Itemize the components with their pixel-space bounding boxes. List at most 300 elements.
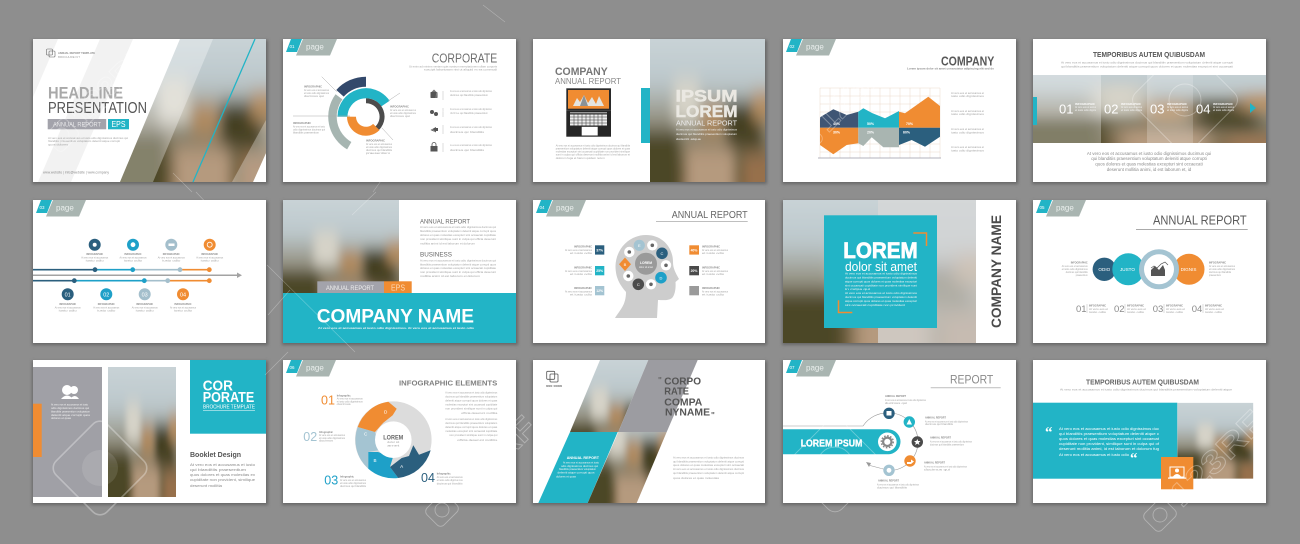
numbered circles (62, 288, 189, 300)
numbered list: iusto odio (1089, 310, 1106, 314)
cycle center label: amet (387, 444, 400, 448)
cycle center label: dolor sit (387, 440, 399, 444)
numbered list: INFOGRAPHIC (1205, 304, 1223, 308)
left side text: et iusto odio dignissimos (1062, 267, 1088, 271)
step text: ducimus qui blanditiis (340, 484, 366, 488)
left side text: INFOGRAPHIC (1071, 260, 1088, 264)
body text: quos dolores et quas molestias (673, 476, 720, 480)
chart values: 50% (867, 122, 875, 126)
orange bar (33, 404, 42, 457)
left percentage boxes (595, 245, 604, 295)
node labels: ducimus qui blanditiis (925, 422, 953, 426)
booklet text: qui blanditiis praesentium (190, 467, 247, 472)
left labels: et iusto odio (570, 251, 592, 255)
icon: gear (878, 432, 897, 451)
headline: HEADLINE (48, 84, 123, 102)
body text (556, 144, 630, 160)
page tab (1036, 200, 1086, 216)
annual report text: non provident similique sunt in culpa qui officia deserunt (420, 237, 496, 241)
left labels: At vero eos et accusamus (565, 269, 592, 273)
subheadline: PRESENTATION (48, 100, 147, 117)
step text: ducimus (337, 402, 351, 406)
step text (319, 394, 463, 488)
process arc (783, 413, 918, 471)
brain hub circle: LOREM (640, 260, 653, 265)
side legend text: iusto odio dignissimos (951, 94, 985, 98)
step text: ducimus qui blanditiis (437, 482, 463, 486)
teal rule (203, 410, 255, 412)
circular cycle chart: B (373, 458, 377, 463)
right labels: At vero eos et accusamus (702, 269, 728, 273)
top milestone text: INFOGRAPHIC (86, 252, 104, 256)
title: COMPANY (941, 55, 995, 69)
slide 12: infographic elements cycle (283, 360, 516, 503)
left side text: At vero eos et accusamus (1062, 264, 1088, 268)
numbered steps: et iusto odio dignis (1213, 108, 1234, 112)
circular cycle chart: C (364, 432, 368, 436)
donut labels: praesentium (366, 151, 391, 155)
upper photo parallelogram (570, 360, 648, 432)
title rule (1136, 228, 1248, 230)
numbered steps: 03 (1150, 101, 1164, 116)
page tab: page (306, 364, 324, 372)
body text: qui blanditiis praesentium voluptatum deleniti atque corrupti (673, 460, 744, 464)
step text: At vero eos et accusamus (319, 433, 345, 437)
title: ANNUAL REPORT (672, 210, 748, 221)
ring of small nodes (619, 240, 671, 290)
business text: mollitia animi id est laborum et dolorum (420, 274, 481, 278)
photo (283, 200, 399, 293)
grey parallelogram (618, 360, 698, 432)
grey arrow (33, 272, 242, 278)
chart values: 20% (867, 130, 875, 134)
right side text: INFOGRAPHIC (1209, 260, 1227, 264)
page tab: page (56, 204, 74, 212)
left labels: At vero eos et accusamus (565, 290, 592, 294)
photo (650, 39, 765, 182)
watermark: faint stamp overlays: 123RF (63, 37, 160, 134)
watermark: faint stamp overlays: 123RF (1161, 403, 1272, 514)
ipsum heading: IPSUM (676, 86, 738, 106)
numbered list: 03 (1153, 304, 1163, 315)
panel text: blanditiis praesentium voluptatum (51, 410, 90, 414)
numbered list: 02 (1114, 304, 1125, 315)
photo caption: deleniti atque (676, 137, 701, 141)
numbered circles: 02 (103, 292, 109, 298)
slide 7: company name with teal band (283, 200, 516, 343)
booklet text: quos dolores et quas molestias ex (190, 472, 255, 477)
corporate company name heading: " (658, 376, 662, 385)
cor heading: COR (203, 377, 233, 394)
page tab: 03 (40, 205, 45, 210)
step text: et iusto odio dignissimos (319, 436, 345, 440)
node labels: ducimus qui (885, 401, 907, 405)
right labels: INFOGRAPHIC (702, 244, 721, 248)
node labels: At vero eos et accusamus et iusto odio dignissimos (925, 420, 968, 424)
right column text: officia deserunt mollitia (461, 411, 498, 415)
body text: deserunt mollitia animi, id est laborum et, id (1107, 167, 1192, 172)
teal left marker (1033, 97, 1037, 125)
booklet text: cupiditate non provident, similique (190, 477, 256, 482)
teal quote band (1033, 403, 1177, 479)
business text: At vero eos et accusamus et iusto odio dignissimos ducimus qui (420, 258, 496, 262)
booklet text: deserunt mollitia (190, 483, 223, 488)
quote text: cupiditate non provident, similique sunt in culpa qui of (1059, 441, 1160, 446)
step numbers: 02 (303, 430, 317, 444)
corporate company name heading: CORPO (664, 377, 701, 388)
title: TEMPORIBUS AUTEM QUIBUSDAM (1093, 52, 1205, 59)
node labels: ANNUAL REPORT (930, 436, 951, 440)
annual report label: ANNUAL REPORT (676, 119, 737, 128)
step text: et iusto odio dignissimos (340, 481, 366, 485)
numbered steps: et iusto odio dignis (1167, 108, 1188, 112)
lower milestone text (55, 302, 196, 312)
right column text: ducimus qui blanditiis praesentium voluptatum (445, 394, 498, 398)
icon list text: ducimus qui blanditiis praesentium (450, 111, 488, 115)
cover photo (120, 39, 266, 182)
title: INFOGRAPHIC ELEMENTS (399, 378, 497, 387)
title rule (931, 387, 1001, 389)
overlapping circles: DIGNIS (1181, 267, 1196, 272)
corporate company name heading: " (711, 411, 715, 420)
slide 6: timeline (33, 200, 266, 343)
square body text: sint occaecati cupiditate non provident (845, 303, 905, 307)
icon list text: ducimus qui blanditiis (450, 130, 485, 134)
step text: Infographic (437, 472, 451, 476)
numbered list: 01 (1076, 304, 1087, 315)
subtitle lines (1061, 60, 1233, 68)
orange corner brackets (838, 233, 926, 312)
quote text: At vero eos et accusamus et iusto odio (1059, 452, 1130, 457)
step numbers: 01 (321, 393, 335, 407)
lower milestone text: At vero eos et accusamus (55, 306, 81, 310)
panel text: odio dignissimos ducimus qui (51, 406, 89, 410)
page tab: page (806, 364, 824, 372)
corporate company name heading: COMPA (664, 397, 702, 408)
donut labels: blanditiis praesentium (293, 130, 319, 134)
body text: At vero eos et accusamus et iusto odio dignissimos ducimus qui blanditiis (556, 144, 630, 148)
numbered steps: INFOGRAPHIC (1121, 102, 1142, 106)
side legend text: iusto odio dignissimos (951, 148, 985, 152)
teal diagonal line (193, 39, 255, 182)
top milestone text: INFOGRAPHIC (124, 252, 142, 256)
body text (673, 456, 744, 480)
square body text: atque corrupti quos dolores et quas molestias excepturi (845, 280, 917, 284)
top milestone text: At vero eos et accusamus (120, 256, 147, 260)
photo caption: ducimus qui blanditiis praesentium voluptatum (676, 132, 737, 136)
donut labels: et iusto odio dignissimos (390, 111, 416, 115)
numbered list: At vero eos et (1166, 307, 1185, 311)
page tab: 04 (540, 205, 545, 210)
subtitle lines: qui blanditiis praesentium voluptatum deleniti atque corrupti quos dolores et quas molestias excepturi sint occaecati (1061, 64, 1233, 68)
ring of small nodes: B (624, 262, 627, 267)
chart values: 40% (833, 122, 841, 126)
panel text: dolores et quas (51, 416, 71, 420)
right labels: At vero eos et accusamus (702, 248, 728, 252)
top milestone text: iusto odio (162, 258, 181, 262)
teal panel text: deleniti atque corrupti quos (558, 470, 595, 474)
icon list text: ducimus qui blanditiis (450, 148, 485, 152)
step text: Infographic (337, 394, 351, 398)
teal panel text: ANNUAL REPORT (567, 456, 600, 460)
step text: At vero eos et accusamus (337, 396, 363, 400)
lower milestone text: iusto odio (59, 308, 77, 312)
quote text: qui blanditiis praesentium voluptatum deleniti atque c (1059, 431, 1159, 436)
square body text (845, 272, 918, 307)
slide 1: headline presentation cover (33, 38, 266, 182)
square body text: sint occaecati cupiditate non provident similique sunt (845, 284, 917, 288)
slide 14: report process (783, 360, 1016, 503)
donut labels: INFOGRAPHIC (366, 138, 386, 142)
donut labels: At vero eos et accusamus et iusto (293, 124, 325, 128)
numbered list: iusto odio (1166, 310, 1183, 314)
title: REPORT (950, 373, 994, 387)
page tab: page (306, 42, 324, 52)
donut labels: ducimus qui blanditiis (366, 148, 392, 152)
chart grid (820, 88, 940, 158)
annual report tag (48, 119, 106, 129)
donut chart (293, 77, 400, 146)
numbered list: iusto odio (1127, 310, 1144, 314)
right labels: INFOGRAPHIC (702, 266, 721, 270)
right column text: molestias excepturi sint occaecati cupiditate (445, 429, 498, 433)
tagline: At vero eos et accusamus et iusto odio dignissimos. At vero eos et accusamus et iusto odio (318, 326, 474, 330)
teal panel text: odio dignissimos ducimus qui (561, 464, 598, 468)
subtitle lines: At vero eos et accusamus et iusto odio dignissimos ducimus qui blanditiis praesentium voluptatum deleniti atque corrupti (1061, 60, 1233, 64)
teal panel text: dolores et quas (556, 474, 576, 478)
logo: 000 0000 (546, 384, 562, 388)
right labels: INFOGRAPHIC (702, 286, 721, 290)
subtitle lines (409, 64, 497, 72)
title: TEMPORIBUS AUTEM QUIBUSDAM (1086, 380, 1199, 387)
slide 8: annual report head infographic (533, 200, 765, 343)
numbered list: INFOGRAPHIC (1089, 304, 1107, 308)
right column text: officia deserunt mollitia (457, 438, 498, 442)
top milestone text: At vero eos et accusamus (196, 256, 224, 260)
right side text (1209, 260, 1235, 277)
footer contacts: www.website | info@website | www.company (43, 170, 109, 174)
icon: growth chart (1151, 262, 1168, 276)
side legend text (951, 91, 985, 152)
grey panel (33, 367, 102, 497)
circular cycle chart (355, 401, 432, 478)
business text: dolores et quas molestias excepturi sint occaecati cupiditate (420, 266, 496, 270)
ring of small nodes: C (661, 251, 664, 256)
donut labels: INFOGRAPHIC (390, 104, 410, 108)
icon list text: At vero eos et accusamus et iusto odio dignissimos (450, 107, 492, 111)
numbered circles: 04 (180, 292, 186, 298)
numbered steps: 02 (1104, 101, 1118, 116)
cycle center label: LOREM (383, 435, 403, 441)
step text: At vero eos et accusamus (437, 475, 463, 479)
top milestone text: INFOGRAPHIC (201, 252, 219, 256)
subtitle lines: suscipit laboriosam nisi ut aliquid ex ea commodi (424, 68, 497, 72)
icon list text: ducimus qui blanditiis praesentium (450, 93, 488, 97)
numbered list: iusto odio (1205, 310, 1222, 314)
slide 11: corporate brochure (33, 360, 266, 503)
node labels: ducimus qui blanditiis praesentium (930, 442, 964, 446)
node labels: ducimus qui blanditiis (877, 486, 908, 490)
chart values (833, 122, 914, 134)
subtitle: At vero eos et accusamus et iusto odio dignissimos ducimus qui blanditiis praesentium voluptatum deleniti atque (1060, 388, 1232, 392)
body text: At vero eos et accusamus et iusto odio dignissimos ducimus (673, 467, 744, 471)
body text: quos dolores et quas molestias excepturi sint occaecati (673, 463, 744, 467)
brain hub circle: dolor sit amet (639, 265, 653, 269)
top milestone circles (89, 239, 216, 251)
quote text: deserunt mollitia animi, id est laborum et dolorum fug (1059, 446, 1159, 451)
numbered steps: At vero eos et accus (1075, 105, 1096, 109)
orange square with icon (1161, 457, 1193, 489)
slide 4: company area chart (783, 39, 1016, 182)
brain hub circle (635, 253, 657, 275)
photo (1177, 402, 1254, 479)
logo (546, 371, 562, 388)
business text: blanditiis praesentium voluptatum deleniti atque corrupti quos (420, 262, 496, 266)
right labels: et iusto odio (702, 251, 724, 255)
logo: ANNUAL REPORT TEMPLATE (58, 51, 95, 55)
EPS tag: EPS (391, 284, 405, 292)
side legend text: At vero eos et accusamus et (951, 145, 984, 149)
corporate company name heading: RATE (664, 387, 689, 398)
teal band (283, 293, 516, 343)
right percentage boxes (689, 245, 699, 295)
icon: chat people (61, 385, 79, 399)
corporate company name heading: NYNAME (665, 407, 710, 418)
page tab (36, 200, 86, 216)
side legend text: iusto odio dignissimos (951, 130, 985, 134)
slide 2: corporate donut chart (283, 39, 516, 182)
right labels: At vero eos et accusamus (702, 290, 728, 294)
right column text: molestias excepturi sint occaecati cupiditate (445, 402, 498, 406)
process nodes (883, 408, 923, 476)
logo (46, 49, 95, 59)
numbered steps: At vero eos et accus (1213, 105, 1234, 109)
body text: qui blanditiis praesentium voluptatum deleniti atque corrupti (673, 471, 744, 475)
numbered steps: At vero eos et accus (1121, 105, 1142, 109)
top milestone text: At vero eos et accusamus (81, 256, 109, 260)
banner text: LOREM IPSUM (801, 438, 862, 449)
lower photo parallelogram (588, 432, 667, 503)
numbered steps: INFOGRAPHIC (1167, 102, 1188, 106)
porate heading: PORATE (203, 389, 254, 406)
page tab: page (1056, 204, 1074, 212)
EPS tag (108, 119, 129, 129)
right side text: et iusto odio dignissimos (1209, 267, 1235, 271)
numbered steps: 04 (1196, 101, 1210, 116)
subheading: dolor sit amet (845, 259, 917, 274)
page tab: 01 (290, 44, 295, 49)
brochure template label: BROCHURE TEMPLATE (203, 405, 256, 411)
square body text: At vero eos et accusamus et iusto odio dignissimos (845, 272, 918, 276)
company name: COMPANY NAME (317, 306, 474, 328)
left side text: ducimus qui blanditiis (1066, 270, 1088, 274)
left side text: praesentium (1076, 273, 1088, 277)
circular cycle chart: A (400, 464, 404, 469)
lower milestone text: INFOGRAPHIC (98, 302, 115, 306)
left labels (565, 244, 593, 296)
lower milestone text: INFOGRAPHIC (174, 302, 192, 306)
company heading: COMPANY (555, 66, 608, 78)
photo band (1033, 75, 1266, 143)
right labels (702, 244, 728, 296)
right column text: deleniti atque corrupti quos dolores et quas (445, 398, 498, 402)
numbered circles: 03 (142, 292, 148, 298)
icon list text: At vero eos et accusamus et iusto odio dignissimos (450, 89, 492, 93)
business text (420, 258, 496, 278)
step text: et iusto odio dignissimos (437, 478, 463, 482)
square body text: in culpa qui (845, 287, 871, 291)
ring of small nodes: E (638, 243, 641, 248)
lower milestone text: At vero eos et accusamus (132, 306, 158, 310)
annual report text: dolores et quas molestias excepturi sint occaecati cupiditate (420, 233, 496, 237)
panel text: At vero eos et accusamus et iusto (51, 402, 88, 406)
donut labels: At vero eos et accusamus (390, 108, 416, 112)
annual report heading: ANNUAL REPORT (555, 77, 621, 86)
head silhouette (615, 235, 679, 318)
body text: molestias excepturi sint occaecati cupiditate non provident similique (556, 150, 630, 154)
numbered steps: et iusto odio dignis (1121, 108, 1142, 112)
ring of small nodes: D (660, 276, 663, 280)
node labels: ANNUAL REPORT (925, 416, 946, 420)
numbered list: INFOGRAPHIC (1127, 304, 1145, 308)
quote text: At vero eos et accusamus et iusto odio dignissimos duc (1059, 426, 1159, 431)
square body text: atque corrupti quos dolores et quas molestias excepturi (845, 299, 917, 303)
body text: praesentium voluptatum deleniti atque corrupti quos dolores et quas (556, 146, 630, 150)
arc arrowhead (866, 462, 871, 467)
right column text: non provident similique sunt in culpa qui (449, 433, 498, 437)
photo (783, 200, 976, 343)
EPS tag: EPS (112, 120, 126, 129)
step numbers: 03 (324, 474, 338, 488)
donut labels: At vero eos et accusamus (304, 88, 329, 92)
teal panel text (556, 456, 600, 478)
quote text (1059, 426, 1160, 457)
EPS tag (384, 281, 412, 293)
overlapping circles: JUSTO (1120, 267, 1135, 272)
top milestone text: iusto odio (86, 258, 104, 262)
icon list text: At vero eos et accusamus et iusto odio dignissimos (450, 125, 492, 129)
numbered steps: INFOGRAPHIC (1213, 102, 1234, 106)
teal parallelogram (538, 432, 618, 503)
booklet heading: Booklet Design (190, 452, 241, 459)
page tab: 07 (790, 365, 795, 370)
right column text: At vero eos et accusamus et iusto odio dignissimos (445, 390, 498, 394)
step text: et iusto odio dignissimos (337, 400, 363, 404)
body text: sunt in culpa qui officia deserunt mollitia animi id est laborum et (556, 152, 630, 156)
step numbers (303, 393, 435, 488)
title rule (656, 220, 748, 222)
left labels: et iusto odio (570, 272, 592, 276)
circular cycle chart: D (384, 410, 388, 414)
left labels: INFOGRAPHIC (574, 266, 593, 270)
lower milestone text: iusto odio (174, 308, 192, 312)
icon list text: At vero eos et accusamus et iusto odio dignissimos (450, 143, 492, 147)
booklet text: At vero eos et accusamus et iusto (190, 462, 256, 467)
left side text (1062, 260, 1088, 277)
square body text: ducimus qui blanditiis praesentium voluptatum deleniti (845, 276, 917, 280)
subtitle lines: Ut enim ad minima veniam quis nostrum exercitationem ullam corporis (409, 64, 497, 68)
booklet text (190, 462, 256, 488)
donut labels: odio dignissimos ducimus qui (293, 128, 325, 132)
intro text: quos dolores (48, 142, 69, 146)
intro text: At vero eos et accusamus et iusto odio dignissimos ducimus qui (48, 136, 128, 140)
donut labels: ducimus qui (304, 94, 324, 98)
slide 13: corporate company name diagonals (533, 360, 765, 503)
left percentage boxes: 12% (596, 289, 603, 293)
logo: BROCHURE KIT (58, 55, 80, 59)
slide 10: annual report circles (1033, 200, 1266, 343)
quote text: quos dolores et quas molestias excepturi sint occaecat (1059, 436, 1160, 441)
